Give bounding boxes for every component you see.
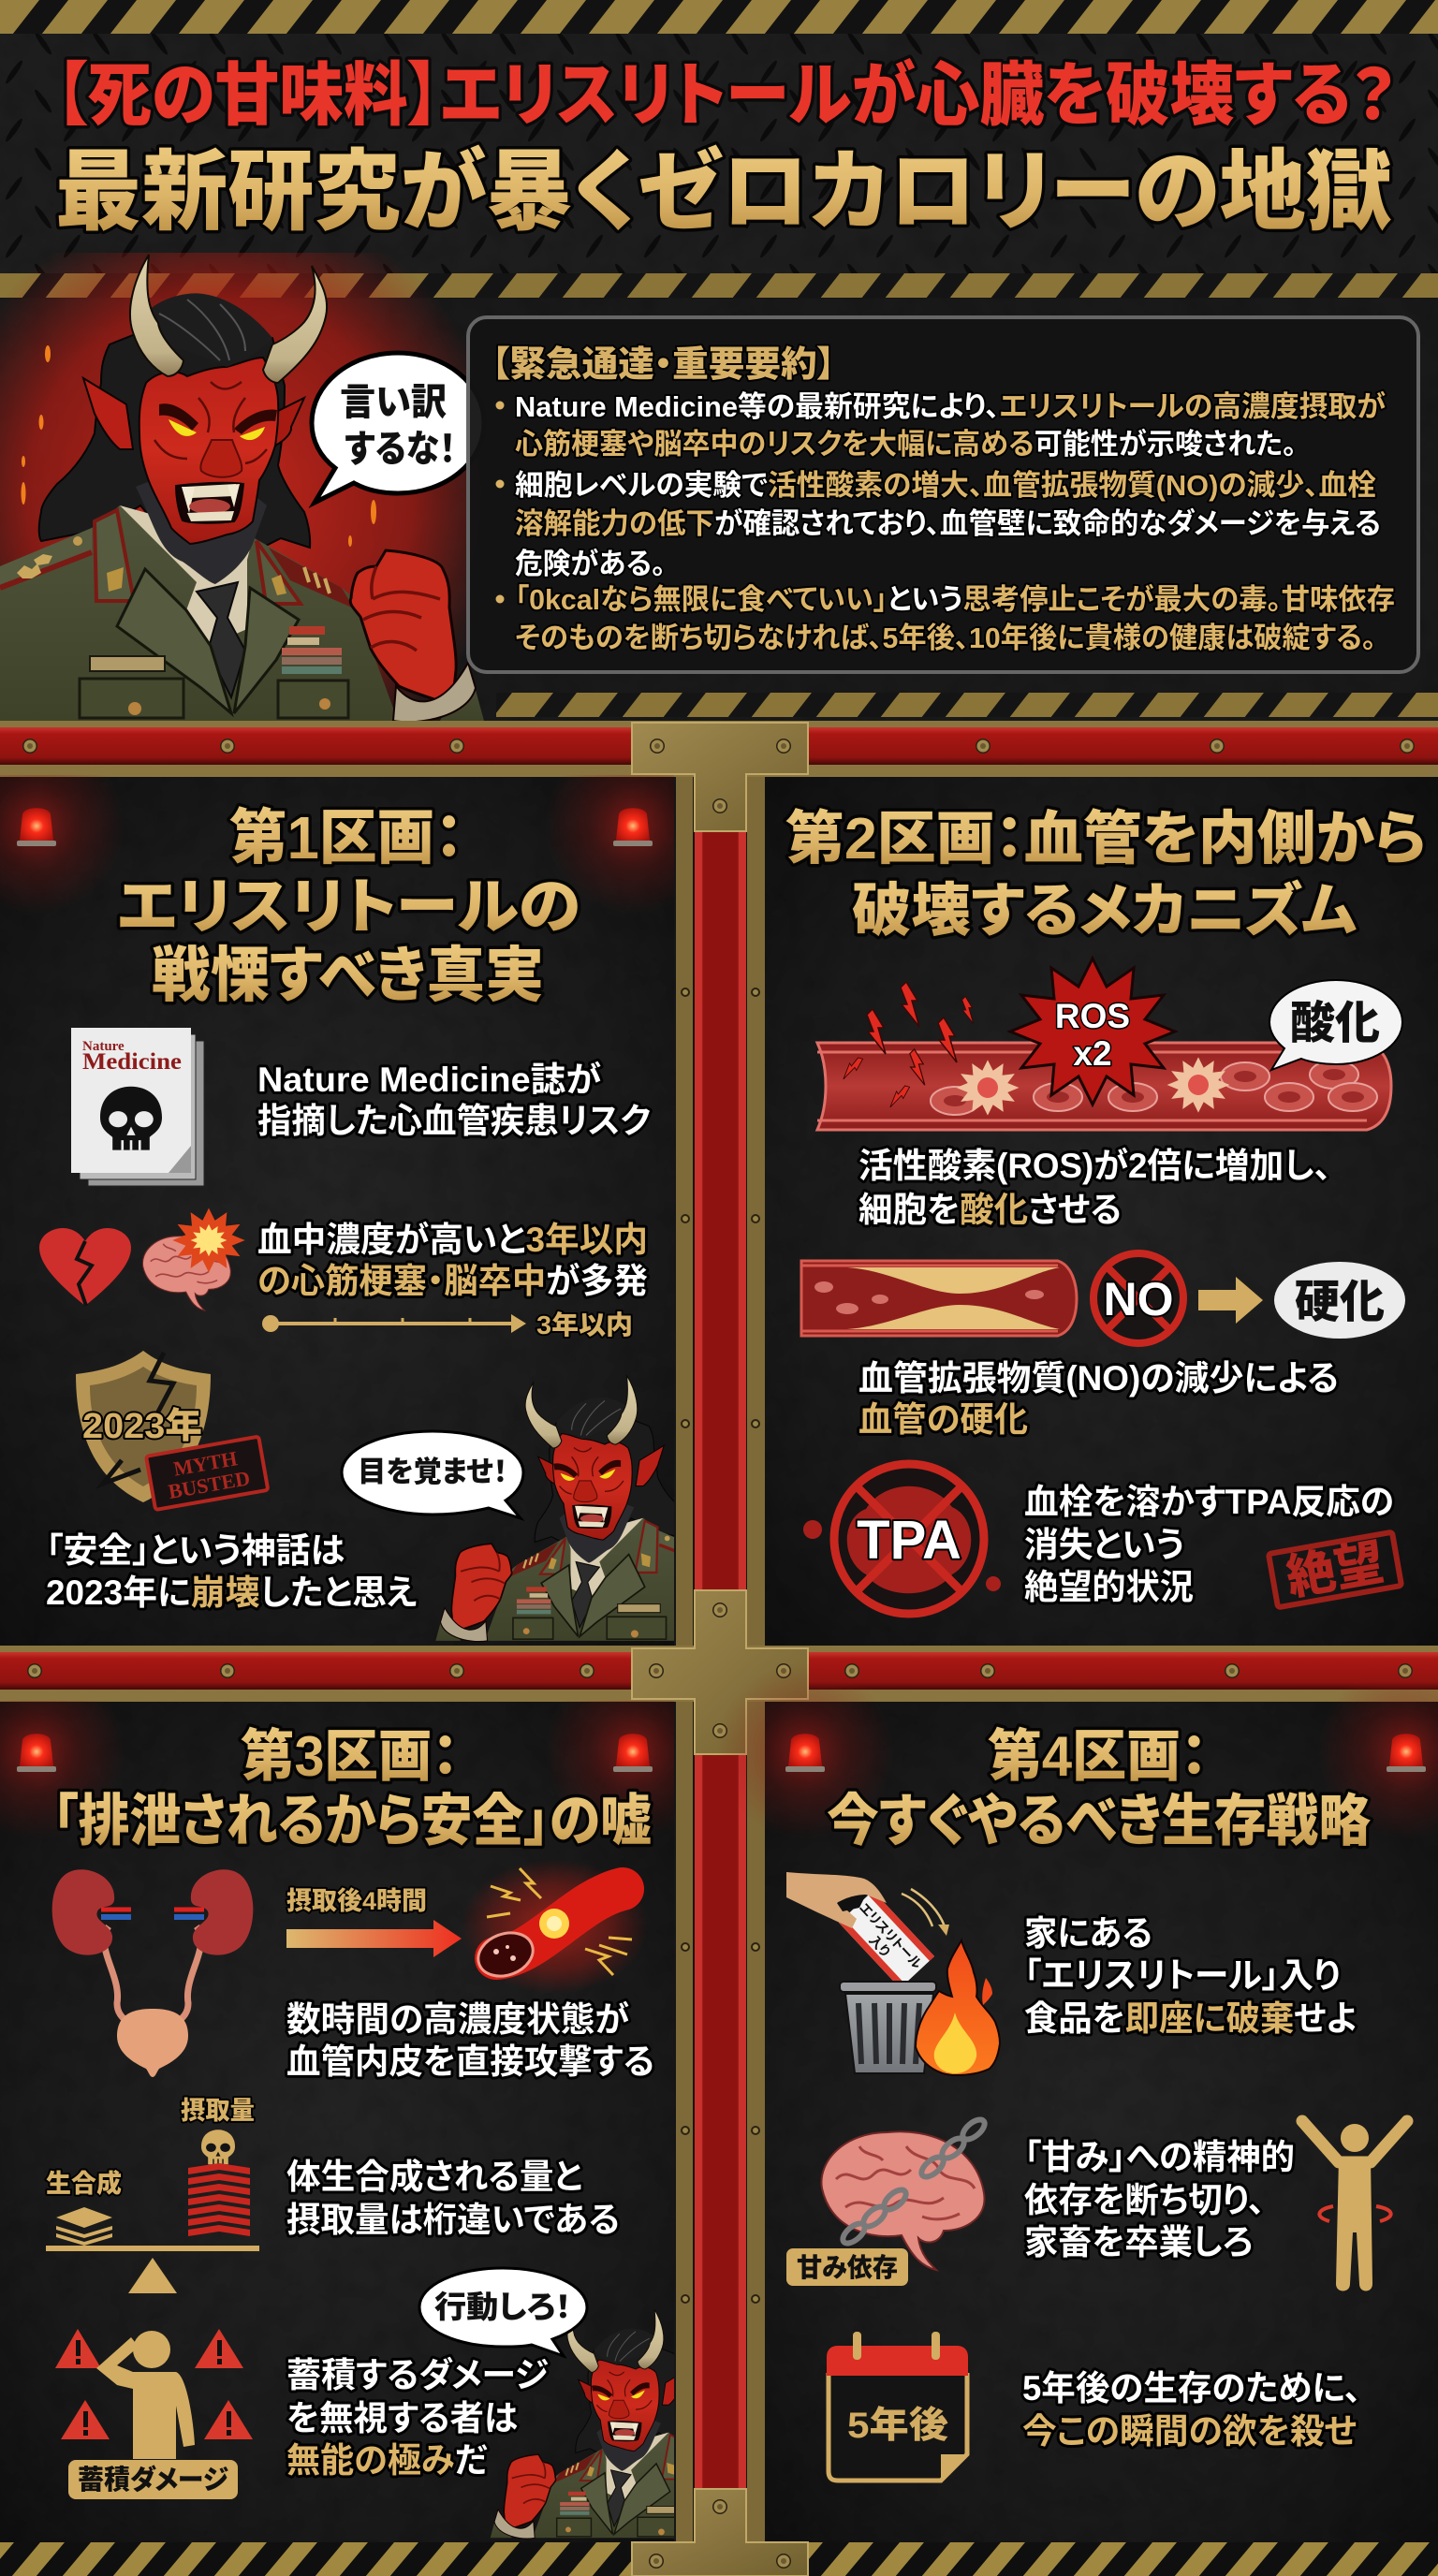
bubble: 硬化: 硬化 [1295, 1278, 1385, 1327]
hazard stripe: bottom [0, 2542, 1438, 2576]
hazard stripe: under title [0, 273, 1438, 298]
icon: discard packet in trash with fire [786, 1872, 1000, 2075]
summary bullets: 溶解能力の低下が確認されており、血管壁に致命的なダメージを与える [515, 507, 1381, 540]
text: stroke risk [257, 1221, 648, 1300]
icon: brain with explosion [142, 1208, 245, 1310]
text: ignoring damage: 無能の極みだ [286, 2441, 488, 2480]
panel 1: heading: 第1区画： [229, 804, 463, 871]
text: five years: 今この瞬間の欲を殺せ [1022, 2412, 1357, 2451]
text: ROS: 細胞を酸化させる [858, 1191, 1122, 1229]
text: ignoring damage: 蓄積するダメージ [286, 2356, 549, 2394]
timeline: within 3 years [262, 1310, 633, 1339]
text: five years [1022, 2369, 1361, 2451]
text: discard: 家にある [1024, 1914, 1152, 1953]
icon: calendar 5 years later [827, 2332, 968, 2481]
illustration: balance of synthesis vs intake [46, 2097, 259, 2293]
panel 4: heading: 第4区画： [988, 1725, 1208, 1788]
icon: TPA crossed-out clot [803, 1464, 1001, 1614]
text: NO [858, 1359, 1339, 1439]
panel 3: heading [52, 1725, 652, 1852]
label and arrow: 4 hours after intake [286, 1887, 462, 1957]
text: myth collapse: 2023年に崩壊したと思え [46, 1573, 418, 1612]
illustration: narrowed artery [801, 1261, 1077, 1336]
summary bullets: 心筋梗塞や脳卒中のリスクを大幅に高める可能性が示唆された。 [515, 428, 1297, 461]
text: myth collapse: 「安全」という神話は [46, 1531, 345, 1570]
speech bubble: 酸化 [1269, 980, 1402, 1070]
icon: broken heart [39, 1228, 131, 1306]
hazard stripe: under summary [496, 693, 1438, 717]
speech bubble: 言い訳するな: するな！ [345, 429, 456, 470]
summary bullets: そのものを断ち切らなければ、5年後、10年後に貴様の健康は破綻する。 [515, 622, 1376, 654]
text: TPA [1024, 1483, 1394, 1606]
small devil panel 1 [435, 1375, 674, 1642]
panel 1: heading [117, 804, 580, 1009]
text: journal risk: 指摘した心血管疾患リスク [257, 1102, 651, 1140]
badge: ROS x2 [1010, 959, 1175, 1105]
text: discard [1024, 1914, 1357, 2038]
badge: ROS x2: x2 [1073, 1034, 1112, 1073]
speech bubble: 言い訳するな: 言い訳 [340, 382, 447, 423]
illustration: damaged artery [461, 1859, 648, 1994]
text: stroke risk: 血中濃度が高いと3年以内 [257, 1221, 648, 1259]
speech bubble: 行動しろ: 行動しろ！ [434, 2290, 571, 2324]
text: TPA: 消失という [1024, 1526, 1184, 1564]
hazard stripe: top [0, 0, 1438, 34]
icon: cracked shield 2023: 2023年 [82, 1407, 202, 1446]
stamp: myth busted [146, 1437, 268, 1510]
speech bubble: 目を覚ませ [342, 1431, 523, 1518]
illustration: balance of synthesis vs intake: 摂取量 [181, 2097, 255, 2125]
stamp: myth busted: BUSTED [167, 1466, 252, 1503]
summary bullets [496, 390, 1395, 654]
title line 2: 最新研究が暴くゼロカロリーの地獄 [55, 142, 1392, 241]
illustration: balance of synthesis vs intake: 生合成 [46, 2169, 122, 2198]
text: ROS [858, 1147, 1331, 1229]
illustration: kidneys and bladder [52, 1869, 253, 2077]
summary bullets: 「0kcalなら無限に食べていい」という思考停止こそが最大の毒。甘味依存 [515, 583, 1395, 616]
label: sweet dependence [786, 2248, 908, 2286]
text: biosynthesis [286, 2158, 620, 2239]
panel 2: heading [785, 807, 1426, 944]
icon: NO crossed out: NO [1103, 1273, 1174, 1325]
panel 1 sirens [0, 737, 722, 915]
panel 4 sirens [716, 1662, 1438, 1840]
summary bullets: 危険がある。 [515, 548, 666, 580]
illustration: oxidised blood vessel [817, 982, 1391, 1130]
icon: TPA crossed-out clot: TPA [857, 1510, 961, 1571]
text: TPA: 血栓を溶かすTPA反応の [1024, 1483, 1394, 1521]
text: TPA: 絶望的状況 [1024, 1568, 1194, 1606]
panel 1: heading: エリスリトールの [117, 873, 580, 941]
small devil panel 3 [491, 2309, 674, 2539]
text: NO: 血管拡張物質(NO)の減少による [858, 1359, 1339, 1398]
panel 3: heading: 「排泄されるから安全」の嘘 [52, 1790, 652, 1852]
text: NO: 血管の硬化 [858, 1400, 1028, 1439]
summary bullets: Nature Medicine等の最新研究により、エリスリトールの高濃度摂取が [515, 390, 1386, 423]
speech bubble: 行動しろ [419, 2268, 587, 2356]
frame: red and brass beams [0, 721, 1438, 2576]
icon: NO crossed out [1093, 1253, 1183, 1343]
summary heading: 【緊急通達・重要要約】 [492, 345, 835, 385]
text: sweet dependence: 「甘み」への精神的 [1024, 2138, 1295, 2176]
text: journal risk: Nature Medicine誌が [257, 1061, 601, 1099]
label: sweet dependence: 甘み依存 [797, 2253, 898, 2282]
icon: Nature Medicine journal with skull: Nature [82, 1039, 125, 1054]
text: journal risk [257, 1061, 651, 1140]
text: sweet dependence: 家畜を卒業しろ [1024, 2223, 1253, 2261]
text: discard: 食品を即座に破棄せよ [1024, 1999, 1357, 2038]
text: biosynthesis: 摂取量は桁違いである [286, 2201, 620, 2239]
text: ignoring damage [286, 2356, 549, 2480]
text: biosynthesis: 体生合成される量と [286, 2158, 582, 2196]
text: discard: 「エリスリトール」入り [1024, 1956, 1341, 1995]
timeline: within 3 years: 3年以内 [536, 1310, 633, 1339]
panel 2: heading: 破壊するメカニズム [852, 878, 1357, 944]
text: endothelium attack: 数時間の高濃度状態が [286, 2000, 629, 2039]
icon: discard packet in trash with fire: エリスリトール [857, 1900, 925, 1971]
speech bubble: 目を覚ませ: 目を覚ませ！ [358, 1456, 507, 1488]
panel 4: heading [827, 1725, 1371, 1852]
panel: urgent summary [468, 317, 1418, 672]
stamp: 絶望: 絶望 [1283, 1535, 1387, 1606]
icon: person with raised arms [1302, 2121, 1407, 2291]
panel 3 sirens [0, 1662, 722, 1840]
speech bubble: 言い訳するな [312, 353, 484, 503]
text: myth collapse [46, 1531, 418, 1612]
icon: Nature Medicine journal with skull: Medicine [82, 1049, 182, 1075]
icon: discard packet in trash with fire: 入り [866, 1932, 893, 1959]
panel 4: heading: 今すぐやるべき生存戦略 [827, 1790, 1371, 1852]
text: sweet dependence [1024, 2138, 1295, 2261]
label: accumulated damage: 蓄積ダメージ [78, 2464, 229, 2496]
panel 2: heading: 第2区画：血管を内側から [785, 807, 1426, 871]
text: ignoring damage: を無視する者は [286, 2399, 518, 2437]
icon: calendar 5 years later: 5年後 [847, 2406, 948, 2446]
text: stroke risk: の心筋梗塞・脳卒中が多発 [257, 1262, 648, 1300]
arrow: to hardening [1198, 1277, 1263, 1324]
icon: cracked shield 2023 [76, 1351, 211, 1502]
bubble: 硬化 [1274, 1262, 1405, 1339]
text: endothelium attack: 血管内皮を直接攻撃する [286, 2042, 654, 2081]
panel 3: heading: 第3区画： [241, 1725, 459, 1788]
label and arrow: 4 hours after intake: 摂取後4時間 [286, 1887, 427, 1915]
speech bubble: 酸化: 酸化 [1290, 999, 1380, 1048]
icon: brain with broken chains [821, 2116, 988, 2270]
icon: person with warnings [55, 2329, 253, 2459]
icon: Nature Medicine journal with skull [71, 1028, 204, 1186]
stamp: myth busted: MYTH [171, 1446, 239, 1481]
badge: ROS x2: ROS [1055, 997, 1130, 1035]
panel 1: heading: 戦慄すべき真実 [152, 942, 544, 1009]
large devil commander with red glow [0, 253, 484, 721]
text: five years: 5年後の生存のために、 [1022, 2369, 1361, 2408]
text: ROS: 活性酸素(ROS)が2倍に増加し、 [858, 1147, 1331, 1185]
text: sweet dependence: 依存を断ち切り、 [1024, 2181, 1265, 2219]
summary bullets: 細胞レベルの実験で活性酸素の増大、血管拡張物質(NO)の減少、血栓 [515, 469, 1376, 502]
text: endothelium attack [286, 2000, 654, 2081]
